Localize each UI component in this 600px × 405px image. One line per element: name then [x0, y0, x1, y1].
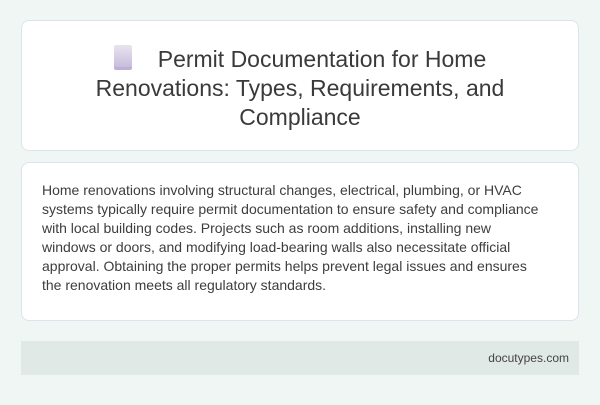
panel: title card [21, 20, 579, 151]
text block: description: Home renovations involving structural changes, electrical, plumbing, or HVAC systems typically require permit documentation to ensure safety and compliance with local building codes. Projects such as room additions, installing new windows or doors, and modifying load-bearing walls also necessitate official approval. Obtaining the proper permits helps prevent legal issues and ensures the renovation meets all regulatory standards. [42, 182, 538, 293]
footer [21, 341, 579, 375]
footer: docutypes.com [488, 351, 569, 365]
panel: description card [21, 162, 579, 321]
title: Permit Documentation for Home Renovations: Types, Requirements, and Compliance [96, 46, 504, 130]
